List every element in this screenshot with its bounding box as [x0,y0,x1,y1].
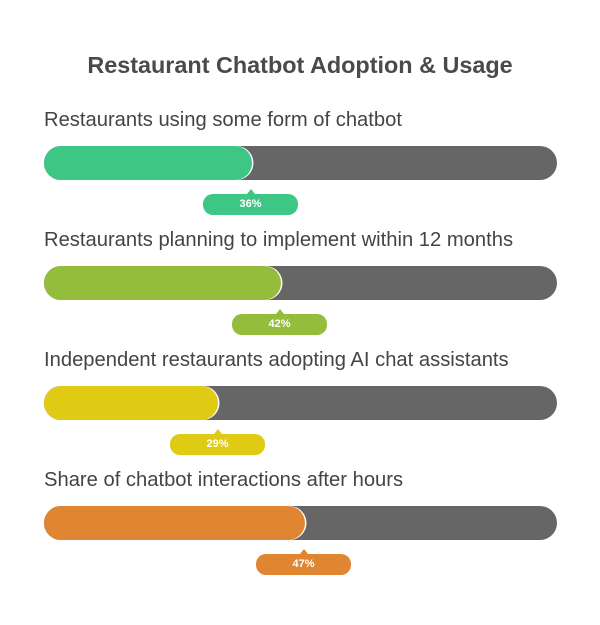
badge: 47% [256,554,351,575]
badge: 47%: 47% [292,558,315,570]
badge: 29% [170,434,265,455]
badge: 42%: 42% [268,318,291,330]
badge: 42% [232,314,327,335]
badge: 36%: 36% [239,198,262,210]
label: row 2: Restaurants planning to implement within 12 months [44,229,513,251]
badge: 29%: 29% [206,438,229,450]
label: row 1: Restaurants using some form of chatbot [44,109,402,131]
bar: row 4 [44,506,557,540]
title: Restaurant Chatbot Adoption & Usage [87,52,513,78]
bar: row 1 [44,146,557,180]
label: row 3: Independent restaurants adopting AI chat assistants [44,349,509,371]
label: row 4: Share of chatbot interactions after hours [44,469,403,491]
bar: row 3 [44,386,557,420]
bar: row 2 [44,266,557,300]
badge: 36% [203,194,298,215]
